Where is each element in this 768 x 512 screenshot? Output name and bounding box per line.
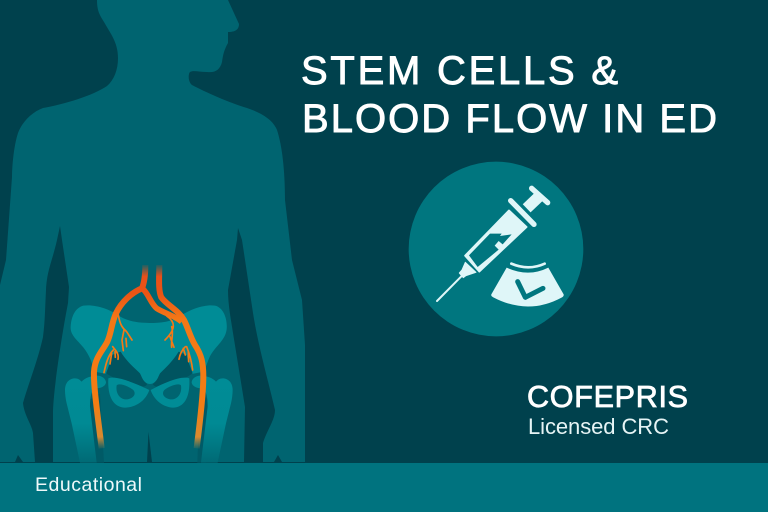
small branches — [104, 315, 193, 373]
footer band — [0, 463, 768, 512]
arteries — [94, 265, 203, 448]
right arm gap — [228, 228, 275, 462]
icon: syringe — [437, 188, 548, 301]
title: STEM CELLS & — [301, 49, 618, 93]
crotch line — [147, 432, 152, 462]
title: BLOOD FLOW IN ED — [302, 97, 717, 141]
femur right — [192, 376, 233, 463]
title — [301, 49, 717, 141]
credential text — [527, 380, 688, 439]
ilium and sacrum — [71, 305, 227, 384]
cross branch — [143, 289, 182, 322]
femur shadow right — [197, 393, 209, 463]
dark inner gap left — [106, 352, 147, 387]
left aorta and limb — [94, 265, 145, 448]
hand notches — [15, 455, 282, 462]
pelvis and femurs — [65, 305, 233, 463]
credential text: Licensed CRC — [528, 414, 669, 439]
body silhouette — [0, 0, 305, 462]
left arm gap — [23, 226, 69, 462]
icon: ultrasound scan — [491, 264, 564, 306]
icon circle: syringe and ultrasound — [409, 162, 583, 336]
pubic ring right — [151, 378, 189, 408]
footer label: Educational — [35, 474, 142, 496]
dark inner gap right — [153, 352, 193, 387]
pubic ring left — [108, 378, 149, 408]
right aorta and limb — [159, 265, 203, 448]
femur left — [65, 376, 106, 463]
credential text: COFEPRIS — [527, 380, 688, 414]
femur shadow left — [89, 393, 104, 463]
